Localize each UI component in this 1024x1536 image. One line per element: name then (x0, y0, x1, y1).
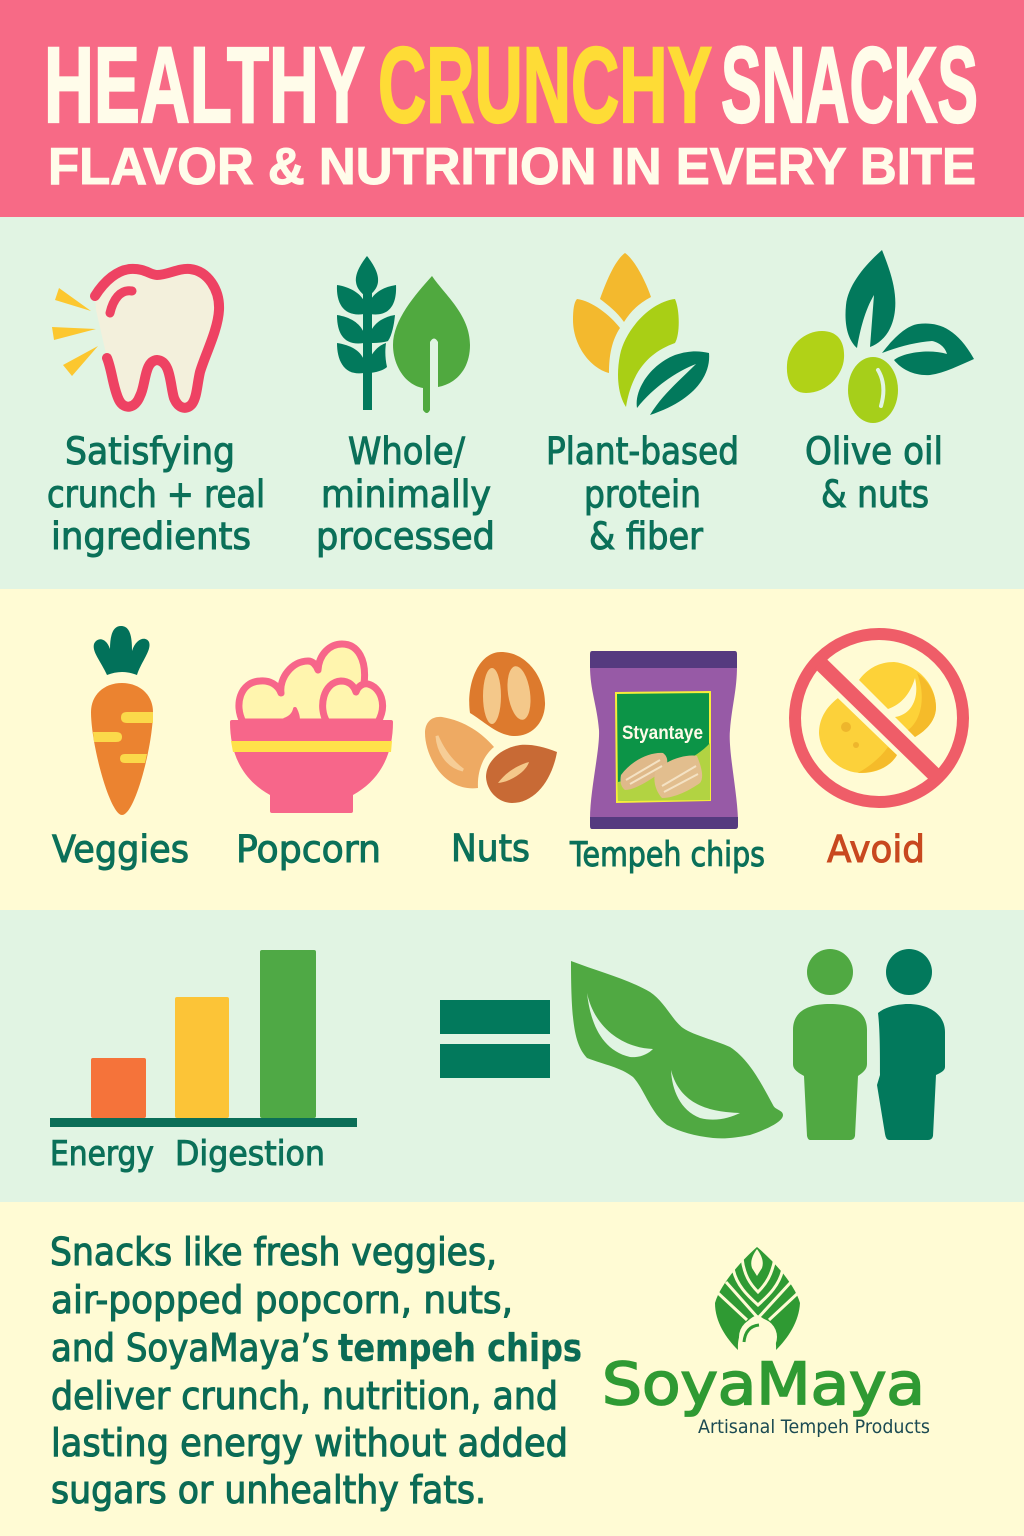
logo tagline: Artisanal Tempeh Products (698, 1416, 930, 1438)
bar labels: Digestion (175, 1134, 325, 1174)
panel: summary and logo (0, 1202, 1024, 1536)
bag label (616, 692, 710, 802)
label: plant-based protein and fiber (546, 430, 739, 558)
logo: SoyaMaya (602, 1247, 930, 1438)
text block: summary: and SoyaMaya’s (51, 1326, 329, 1370)
bag label: Styantaye (622, 723, 703, 744)
icon: plant protein leaves (573, 253, 709, 415)
label: plant-based protein and fiber: Plant-based (546, 430, 739, 473)
bar chart (50, 950, 357, 1174)
label: whole minimally processed: processed (316, 515, 495, 558)
text block: summary: deliver crunch, nutrition, and (51, 1374, 558, 1418)
panel: header (0, 0, 1024, 217)
text block: summary: air-popped popcorn, nuts, (51, 1278, 513, 1322)
label: nuts: Nuts (451, 827, 530, 870)
label: whole minimally processed: minimally (321, 473, 491, 516)
icon: soybean pod (571, 961, 783, 1138)
label: plant-based protein and fiber: & fiber (589, 515, 704, 558)
label: satisfying crunch (47, 430, 265, 558)
bar labels: Energy (50, 1134, 154, 1174)
icon: olives and leaves (787, 250, 974, 423)
text block: summary: tempeh chips (338, 1326, 582, 1370)
panel: benefits (0, 217, 1024, 589)
title: HEALTHY (44, 24, 365, 145)
icon: carrot (91, 626, 153, 815)
label: veggies: Veggies (52, 828, 189, 871)
panel: snack choices (0, 589, 1024, 910)
text block: summary: sugars or unhealthy fats. (51, 1468, 486, 1512)
label: olive oil and nuts (805, 430, 943, 516)
title: CRUNCHY (378, 24, 712, 145)
bar labels (50, 1134, 325, 1174)
icon: nuts (425, 652, 557, 803)
label: satisfying crunch: crunch + real (47, 473, 265, 516)
icon: tempeh chips bag (590, 651, 738, 829)
label: avoid: Avoid (827, 828, 925, 871)
label: olive oil and nuts: Olive oil (805, 430, 943, 473)
label: olive oil and nuts: & nuts (821, 473, 929, 516)
label: popcorn: Popcorn (236, 828, 381, 871)
text block: summary: Snacks like fresh veggies, (50, 1230, 497, 1274)
icon: two people (793, 949, 945, 1140)
label: satisfying crunch: ingredients (51, 515, 251, 558)
label: tempeh chips: Tempeh chips (569, 835, 765, 875)
label: plant-based protein and fiber: protein (584, 473, 701, 516)
icon: avoid sign with cheese (795, 634, 963, 802)
logo leaf mark (715, 1247, 800, 1360)
title (44, 24, 978, 145)
panel: benefits equation (0, 910, 1024, 1202)
icon: wheat and leaf (337, 256, 470, 413)
icon: equals sign (440, 1000, 550, 1078)
icon: tooth with crunch sparks (52, 269, 219, 408)
text block: summary (50, 1230, 582, 1512)
logo wordmark: SoyaMaya (602, 1350, 925, 1418)
label: whole minimally processed (316, 430, 495, 558)
label: whole minimally processed: Whole/ (348, 430, 465, 473)
subtitle: FLAVOR & NUTRITION IN EVERY BITE (48, 138, 976, 196)
text block: summary: lasting energy without added (51, 1421, 568, 1465)
label: satisfying crunch: Satisfying (65, 430, 235, 473)
icon: popcorn bowl (230, 644, 393, 813)
